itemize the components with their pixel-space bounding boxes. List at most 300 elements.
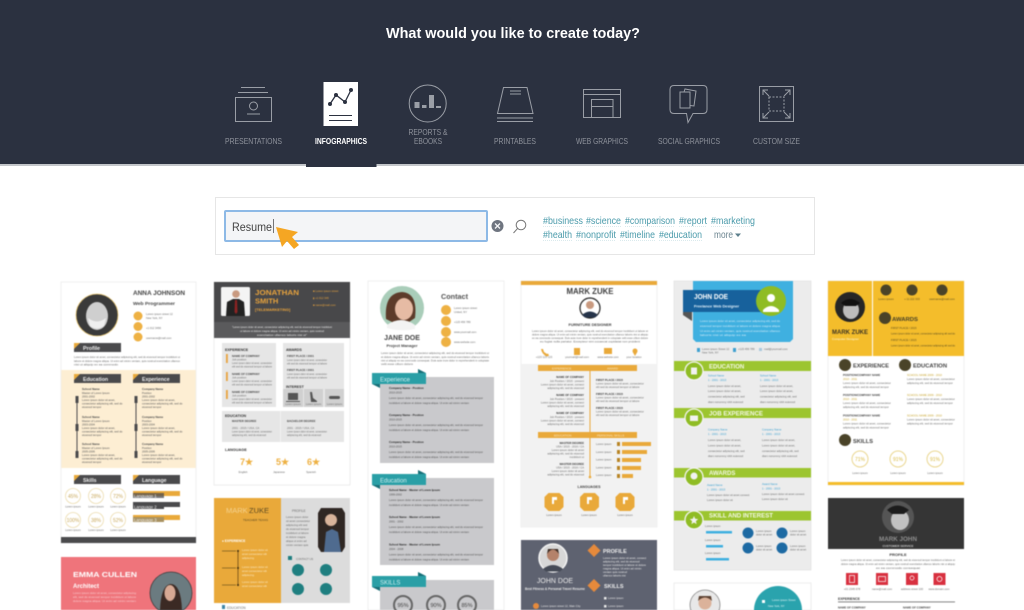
photo: [221, 287, 250, 316]
education entries: [547, 441, 584, 476]
award entries: Lorem ipsum dolor sit amet, consectetur: [596, 382, 644, 386]
languages: Lorem ipsum: [617, 513, 634, 517]
education entries: adipiscing elit, sed do eiusmod: [547, 452, 584, 456]
education panel: Lorem ipsum dolor sit amet, consectetur adipiscing elit, sed do eiusmod tempor: [389, 498, 483, 502]
experience panel: elit sed do eiusmod tempor ut labore: [232, 364, 272, 368]
awards: Lorem ipsum dolor sit amet, consectetur adipiscing elit sed do: [891, 344, 955, 348]
awards panel: [283, 343, 344, 407]
skills: SKILLS: [604, 584, 624, 590]
name: JANE DOE: [384, 335, 420, 342]
skills: SKILLS: [853, 439, 873, 445]
skills: Lorem ipsum: [110, 504, 127, 508]
quote: ut labore et dolore magna aliqua. Ut enim ad minim veniam, quis nostrud: [240, 329, 324, 333]
experience entries: adipiscing elit, sed do eiusmod: [547, 386, 584, 390]
experience timeline: adipiscing: [242, 556, 254, 560]
award entries: FIRST PLACE / 2015: [596, 378, 623, 382]
award entries: elit sed do eiusmod tempor ut labore: [596, 399, 640, 403]
experience: adipiscing elit, sed do eiusmod tempor: [843, 405, 889, 409]
experience panel: NAME OF COMPANY: [232, 372, 260, 376]
profile: Lorem ipsum dolor sit amet, consectetur adipiscing elit, sed do eiusmod tempor incididunt ut labore et: [841, 558, 955, 562]
contact row: Lorem ipsum Street 12: [702, 347, 730, 351]
profile text: PROFILE: [292, 509, 306, 513]
section titles: SKILL AND INTEREST: [709, 514, 773, 520]
skills: Lorem ipsum: [608, 596, 624, 600]
name: JONATHAN: [255, 288, 299, 297]
education text: Lorem ipsum dolor sit amet,: [708, 389, 741, 393]
education text: School Name: [760, 374, 777, 378]
education column: eiusmod tempor: [82, 405, 101, 409]
skills: 38%: [91, 518, 102, 524]
contacts: ■ name@mail.com: [313, 303, 336, 307]
job experience text: Lorem ipsum dolor sit amet,: [762, 438, 795, 442]
timeline: [538, 365, 637, 478]
interest icons: Lorem ipsum: [756, 544, 772, 548]
skill bars: Lorem ipsum: [705, 551, 721, 555]
job title: FURNITURE DESIGNER: [568, 323, 612, 327]
education entries: Lorem ipsum dolor sit amet: [552, 469, 584, 473]
education column: Lorem ipsum dolor sit amet,: [82, 453, 115, 457]
skills: 71%: [855, 457, 866, 463]
contact: Lorem ipsum street: [454, 306, 477, 310]
contact row: +123 456 789: [738, 347, 755, 351]
experience: 2010 - 2011: [843, 377, 858, 381]
resume card: Anna Johnson: [61, 282, 196, 543]
languages: Lorem ipsum: [546, 513, 563, 517]
skill bars: Lorem ipsum: [596, 466, 612, 470]
resume card: Mark Zuke teacher: CONTACT US: [296, 557, 313, 561]
teal contact circle: Lorem ipsum Street: [772, 598, 796, 602]
contact: United, NY: [454, 310, 467, 314]
experience panel: 2010-2015: [389, 418, 402, 422]
section bars: [674, 361, 811, 520]
title: What would you like to create today?: [386, 26, 640, 42]
education column: eiusmod tempor: [82, 460, 101, 464]
profile: PROFILE: [603, 549, 627, 555]
teal contact circle: New York, NY: [768, 604, 785, 608]
experience entries: Lorem ipsum dolor sit amet, consect: [541, 418, 584, 422]
profile: Lorem ipsum dolor sit amet, consect: [603, 556, 646, 560]
experience panel: [222, 343, 276, 407]
experience entries: adipiscing elit, sed do eiusmod: [547, 422, 584, 426]
education panel: incididunt ut labore et dolore magna aliqua. Ut enim ad minim veniam: [389, 530, 470, 534]
experience timeline: adipiscing: [242, 573, 254, 577]
name: Computer Designer: [832, 337, 860, 341]
experience: POSITION/COMPANY NAME: [843, 393, 880, 397]
label: social graphics: SOCIAL GRAPHICS: [658, 136, 720, 146]
skills: [65, 475, 127, 532]
name: [226, 506, 269, 522]
experience column: 2005-2006: [142, 450, 155, 454]
experience column: eiusmod tempor: [142, 433, 161, 437]
contact icons: +01 2345 678: [844, 587, 861, 591]
education panel: School Name - Master of Lorem Ipsum: [389, 515, 440, 519]
experience panel: Lorem ipsum dolor sit amet, consectetur adipiscing elit, sed do eiusmod tempor: [389, 423, 483, 427]
education panel: incididunt ut labore et dolore magna aliqua. Ut enim ad minim veniam: [389, 503, 470, 507]
awards text: 1 - 2001 - 2013: [707, 488, 726, 492]
photo: [380, 286, 424, 330]
experience column: Company Name: [142, 387, 164, 391]
education text: Lorem ipsum dolor sit amet,: [708, 384, 741, 388]
contact row: New York, NY: [702, 350, 719, 354]
skill bars: Lorem ipsum: [705, 538, 721, 542]
education column: consectetur adipiscing elit, sed do: [82, 456, 123, 460]
education panel: Lorem ipsum dolor sit amet, consectetur adipiscing elit, sed do eiusmod tempor: [389, 552, 483, 556]
summary: Lorem ipsum dolor sit amet, consectetur adipiscing elit, sed do eiusmod tempor incididunt ut: [381, 351, 489, 355]
award entries: Lorem ipsum dolor sit amet, consectetur: [596, 410, 644, 414]
education text: Lorem ipsum dolor sit amet,: [760, 384, 793, 388]
interest icons: Lorem ipsum: [790, 544, 806, 548]
skills: 52%: [113, 518, 124, 524]
experience column: Position: [142, 419, 152, 423]
skills panel: SKILLS: [380, 580, 400, 586]
profile heading: [74, 343, 121, 352]
experience panel: Job position: [232, 376, 247, 380]
name: ANNA JOHNSON: [133, 290, 185, 297]
experience panel: EXPERIENCE: [225, 348, 249, 352]
education panel: Lorem ipsum dolor sit amet, consectetur: [232, 430, 272, 434]
awards: FIRST PLACE / 2015: [891, 338, 917, 342]
skill bars: Lorem ipsum: [596, 473, 612, 477]
language ratings: 5★: [276, 457, 290, 467]
resume card: Jane Doe: [368, 281, 504, 610]
skills: Lorem ipsum: [890, 471, 907, 475]
language ratings: English: [239, 470, 248, 474]
resume card: Emma Cullen: [61, 557, 196, 610]
education column: School Name: [82, 442, 100, 446]
experience: EXPERIENCE: [838, 597, 861, 601]
education: adipiscing elit, sed do eiusmod tempor: [907, 422, 953, 426]
skills panel: 90%: [430, 603, 442, 609]
icon: custom size: [760, 86, 794, 122]
awards: FIRST PLACE / 2015: [891, 326, 917, 330]
experience: [838, 597, 955, 610]
experience column: Company Name: [142, 415, 164, 419]
education column: 2003-2004: [82, 422, 95, 426]
hashtags: #science: [586, 215, 621, 227]
name: MARK ZUKE: [832, 330, 868, 336]
photo: [150, 572, 192, 610]
contact: +123 456 789: [454, 320, 471, 324]
language: [133, 475, 180, 522]
education heading: EDUCATION: [227, 606, 246, 610]
profile text: do eiusmod tempor: [286, 527, 309, 531]
award entries: elit sed do eiusmod tempor ut labore: [596, 385, 640, 389]
job experience text: [708, 428, 799, 458]
icon: clear: [492, 220, 504, 232]
timeline: EDUCATION: [554, 434, 571, 438]
skills panel: 95%: [397, 603, 409, 609]
contact row: [697, 347, 788, 354]
education entries: USA / 2015 - 2016 / CA: [556, 444, 584, 448]
photo: [690, 590, 720, 610]
education entries: Lorem ipsum dolor sit amet: [552, 448, 584, 452]
education panel: 2004 - 2008: [389, 547, 404, 551]
search input: [225, 211, 487, 241]
experience entries: Lorem ipsum dolor sit amet, consect: [541, 400, 584, 404]
education panel: Lorem ipsum dolor sit amet, consectetur adipiscing elit, sed do eiusmod tempor: [389, 525, 483, 529]
contact icons: name@mail.com: [872, 587, 893, 591]
experience panel: [372, 369, 494, 463]
name: ZUKE: [249, 506, 269, 515]
icon: printables: [497, 88, 533, 122]
contact icons: [844, 573, 950, 591]
search panel: [216, 198, 814, 254]
name: Project Manager: [386, 343, 418, 348]
section titles: AWARDS: [709, 471, 735, 477]
contacts: ■ Lorem ipsum street: [313, 289, 339, 293]
icon: web graphics: [584, 90, 620, 118]
experience column: consectetur adipiscing elit, sed do: [142, 402, 183, 406]
section titles: EDUCATION: [709, 364, 744, 370]
interest icons: Lorem ipsum: [756, 529, 772, 533]
name: MARK: [226, 506, 248, 515]
contact icons: [288, 556, 332, 595]
skills: [839, 434, 944, 475]
photo: [580, 298, 600, 318]
resume card: Emma Cullen: EMMA CULLEN: [73, 570, 137, 579]
summary: dolore magna aliqua. Ut enim ad minim veniam, quis nostrud exercitation ullamco laboris nisi ut aliquip: [532, 332, 648, 336]
language ratings: Spanish: [306, 470, 316, 474]
experience: 2010 - 2011: [843, 397, 858, 401]
resume card: Jonathan Smith: [214, 282, 350, 485]
section titles: JOB EXPERIENCE: [709, 412, 763, 418]
skills: 91%: [930, 457, 941, 463]
experience panel: incididunt ut labore et dolore magna aliqua. Ut enim ad minim veniam: [389, 428, 470, 432]
label: presentations: PRESENTATIONS: [225, 136, 282, 146]
name: [384, 335, 420, 348]
awards text: Award Name: [707, 483, 723, 487]
experience column: Position: [142, 391, 152, 395]
awards panel: AWARDS: [286, 348, 302, 352]
summary: [381, 351, 490, 366]
label: reports and ebooks: REPORTS &: [408, 127, 448, 137]
education column: consectetur adipiscing elit, sed do: [82, 402, 123, 406]
awards: AWARDS: [892, 317, 918, 323]
name: [879, 537, 917, 548]
awards panel: Lorem ipsum dolor sit amet, consectetur: [287, 372, 327, 376]
education panel: adipiscing elit, sed do eiusmod: [287, 433, 321, 437]
name: SMITH: [255, 296, 278, 306]
header: Lorem ipsum dolor sit amet, consectetur adipiscing elit, sed do: [700, 319, 781, 323]
education text: diam nonummy nibh euismod: [760, 400, 796, 404]
job experience text: Lorem ipsum dolor sit amet,: [708, 444, 741, 448]
education: SCHOOL NAME 2009 - 2010: [907, 393, 942, 397]
icon: search: [514, 220, 526, 233]
award entries: elit sed do eiusmod tempor ut labore: [596, 413, 640, 417]
experience entries: Job Position / 2015 - present: [550, 397, 584, 401]
education panel: School Name - Master of Lorem Ipsum: [389, 488, 440, 492]
job experience text: Company Name: [762, 428, 782, 432]
education text: 1 - 2001 - 2013: [708, 378, 727, 382]
experience entries: Job Position / 2015 - present: [550, 415, 584, 419]
language: Language: [142, 478, 167, 484]
resume card: Emma Cullen: Architect: [73, 584, 99, 590]
resume card: Anna Johnson: Lorem ipsum street 12: [146, 312, 173, 316]
experience panel: Company Name - Position: [389, 386, 424, 390]
experience: adipiscing elit, sed do eiusmod tempor: [843, 385, 889, 389]
education column: Master of Lorem Ipsum: [82, 419, 110, 423]
footer bar: [61, 537, 196, 543]
experience timeline: [222, 539, 268, 588]
contact icons: www.website.com: [597, 355, 619, 359]
job experience text: Lorem ipsum dolor sit amet,: [708, 438, 741, 442]
profile text: [286, 509, 310, 547]
awards panel: INTEREST: [286, 385, 305, 389]
experience panel: Lorem ipsum dolor sit amet, consectetur: [232, 361, 272, 365]
experience panel: NAME OF COMPANY: [232, 354, 260, 358]
skills: Lorem ipsum: [88, 528, 105, 532]
experience column: eiusmod tempor: [142, 460, 161, 464]
summary: velit esse cillum dolore: [381, 362, 414, 366]
experience timeline: amet consectetur elit: [242, 584, 267, 588]
education panel: Education: [380, 478, 407, 484]
languages: Lorem ipsum: [581, 513, 598, 517]
hashtags: [543, 215, 755, 241]
contact: www.website.com: [454, 340, 476, 344]
skills: Lorem ipsum: [88, 504, 105, 508]
contact icons: [878, 284, 955, 301]
education column: Education: [83, 377, 108, 383]
profile heading: Profile: [83, 346, 100, 352]
education: adipiscing elit, sed do eiusmod tempor: [907, 401, 953, 405]
photo: [539, 544, 567, 572]
interest icons: dolor sit amet: [756, 548, 772, 552]
education panel: incididunt ut labore et dolore magna aliqua. Ut enim ad minim veniam: [389, 558, 470, 562]
experience entries: Job Position / 2015 - present: [550, 379, 584, 383]
contact icons: [134, 312, 142, 342]
contact icons: address street 100: [901, 587, 924, 591]
awards: Lorem ipsum dolor sit amet, consectetur adipiscing elit sed do: [891, 332, 955, 336]
resume card: Anna Johnson: username@mail.com: [146, 336, 172, 340]
education panel: EDUCATION: [225, 414, 246, 418]
education column: 2001-2002: [82, 394, 95, 398]
education column: Master of Lorem Ipsum: [82, 391, 110, 395]
education panel: 1999-2002: [389, 492, 402, 496]
hashtags: #marketing: [711, 215, 755, 227]
skill bars: Lorem ipsum: [596, 442, 612, 446]
education column: 2005-2006: [82, 450, 95, 454]
contacts: ▮ +1 012 345: [313, 296, 329, 300]
experience: 2010 - 2011: [843, 418, 858, 422]
experience: POSITION/COMPANY NAME: [843, 373, 880, 377]
experience panel: Company Name - Position: [389, 440, 424, 444]
experience panel: incididunt ut labore et dolore magna aliqua. Ut enim ad minim veniam: [389, 401, 470, 405]
profile text: [74, 355, 180, 366]
skills: Lorem ipsum: [852, 471, 869, 475]
resume card: Anna Johnson: +1 012 3456: [146, 326, 162, 330]
experience entries: NAME OF COMPANY: [556, 375, 584, 379]
job experience text: 1 - 2001 - 2013: [708, 432, 727, 436]
education text: Lorem ipsum dolor sit amet,: [760, 389, 793, 393]
language ratings: 7★: [240, 457, 254, 467]
education entries: USA / 2015 - 2016 / CA: [556, 466, 584, 470]
job experience text: Lorem ipsum dolor sit amet,: [762, 444, 795, 448]
education column: Master of Lorem Ipsum: [82, 446, 110, 450]
name: CUSTOMER SERVICE: [882, 544, 914, 548]
photo: [882, 501, 914, 533]
icon: presentations: [236, 88, 272, 122]
experience timeline: amet consectetur elit: [242, 552, 267, 556]
contacts: [313, 289, 339, 307]
profile text: et dolore magna: [286, 535, 306, 539]
education: Lorem ipsum dolor sit amet, consectetur: [907, 418, 955, 422]
language ratings: Japanese: [273, 470, 285, 474]
awards text: 1 - 2001 - 2013: [762, 486, 781, 490]
skills: Lorem ipsum: [65, 528, 82, 532]
skills: 91%: [893, 457, 904, 463]
education panel: 2001 - 2002: [389, 520, 404, 524]
experience panel: Job position: [232, 358, 247, 362]
experience panel: Experience: [380, 378, 411, 384]
education text: diam nonummy nibh euismod: [708, 400, 744, 404]
experience column: 2001-2002: [142, 394, 155, 398]
name: MARK ZUKE: [566, 287, 614, 296]
section titles: [709, 364, 773, 520]
section badges: [685, 362, 703, 529]
profile text: aliqua ut enim ad: [286, 539, 307, 543]
label: web graphics: WEB GRAPHICS: [576, 136, 628, 146]
experience column: Lorem ipsum dolor sit amet,: [142, 398, 175, 402]
awards text: Lorem ipsum dolor sit: [762, 497, 788, 501]
education column: consectetur adipiscing elit, sed do: [82, 430, 123, 434]
education: EDUCATION: [913, 364, 947, 370]
search input: Resume: [232, 220, 272, 234]
skills: 72%: [113, 494, 124, 500]
profile: [841, 552, 955, 570]
interest icons: dolor sit amet: [756, 532, 772, 536]
summary: nisi ut aliquip ex ea commodo consequat. Duis aute irure dolor in reprehenderit in voluptate: [381, 358, 490, 362]
experience timeline: Lorem ipsum dolor sit: [242, 565, 268, 569]
experience entries: NAME OF COMPANY: [556, 393, 584, 397]
quote: exercitation ullamco laboris nisi ut": [257, 333, 307, 337]
education: SCHOOL NAME 2009 - 2010: [907, 414, 942, 418]
experience entries: [541, 375, 584, 426]
experience panel: Lorem ipsum dolor sit amet, consectetur adipiscing elit, sed do eiusmod tempor: [389, 396, 483, 400]
education column: Lorem ipsum dolor sit amet,: [82, 426, 115, 430]
summary: [532, 329, 648, 344]
hashtags: #timeline: [620, 229, 655, 241]
skill bars: Lorem ipsum: [705, 524, 721, 528]
profile text: Lorem ipsum dolor sit amet, consectetur adipiscing elit, sed do eiusmod tempor incididunt ut: [74, 355, 180, 359]
languages: LANGUAGES: [578, 485, 601, 489]
hashtags: #nonprofit: [576, 229, 616, 241]
photo: [318, 508, 345, 552]
experience panel: NAME OF COMPANY: [232, 390, 260, 394]
contact icons: username@mail.com: [929, 297, 955, 301]
education panel: BACHELOR DEGREE: [287, 419, 316, 423]
name: Web Programmer: [133, 301, 175, 306]
experience panel: elit sed do eiusmod tempor ut labore: [232, 382, 272, 386]
experience: EXPERIENCE: [853, 364, 889, 370]
icon: social graphics: [670, 86, 707, 122]
name: [832, 330, 868, 341]
job experience text: diam nonummy nibh euismod: [708, 454, 744, 458]
education entries: MASTER DEGREE: [560, 462, 584, 466]
header: eiusmod tempor incididunt ut labore et dolore magna aliqua: [700, 324, 781, 328]
profile text: nisi ut aliquip ex ea commodo: [74, 362, 119, 366]
job experience text: consectetur adipiscing elit, sed: [708, 449, 745, 453]
skills: Lorem ipsum: [110, 528, 127, 532]
name: MARK JOHN: [879, 537, 917, 543]
experience: Lorem ipsum dolor sit amet, consectetur: [843, 422, 891, 426]
resume card: Mark Zuke furniture designer: [521, 281, 657, 527]
language: Language 3: [134, 518, 157, 522]
header: Ut enim ad minim veniam, quis nostrud exercitation ullamco: [700, 329, 781, 333]
award entries: FIRST PLACE / 2015: [596, 392, 623, 396]
education panel: Lorem ipsum dolor sit amet, consectetur: [287, 430, 327, 434]
experience column: Company Name: [142, 442, 164, 446]
experience column: Position: [142, 446, 152, 450]
